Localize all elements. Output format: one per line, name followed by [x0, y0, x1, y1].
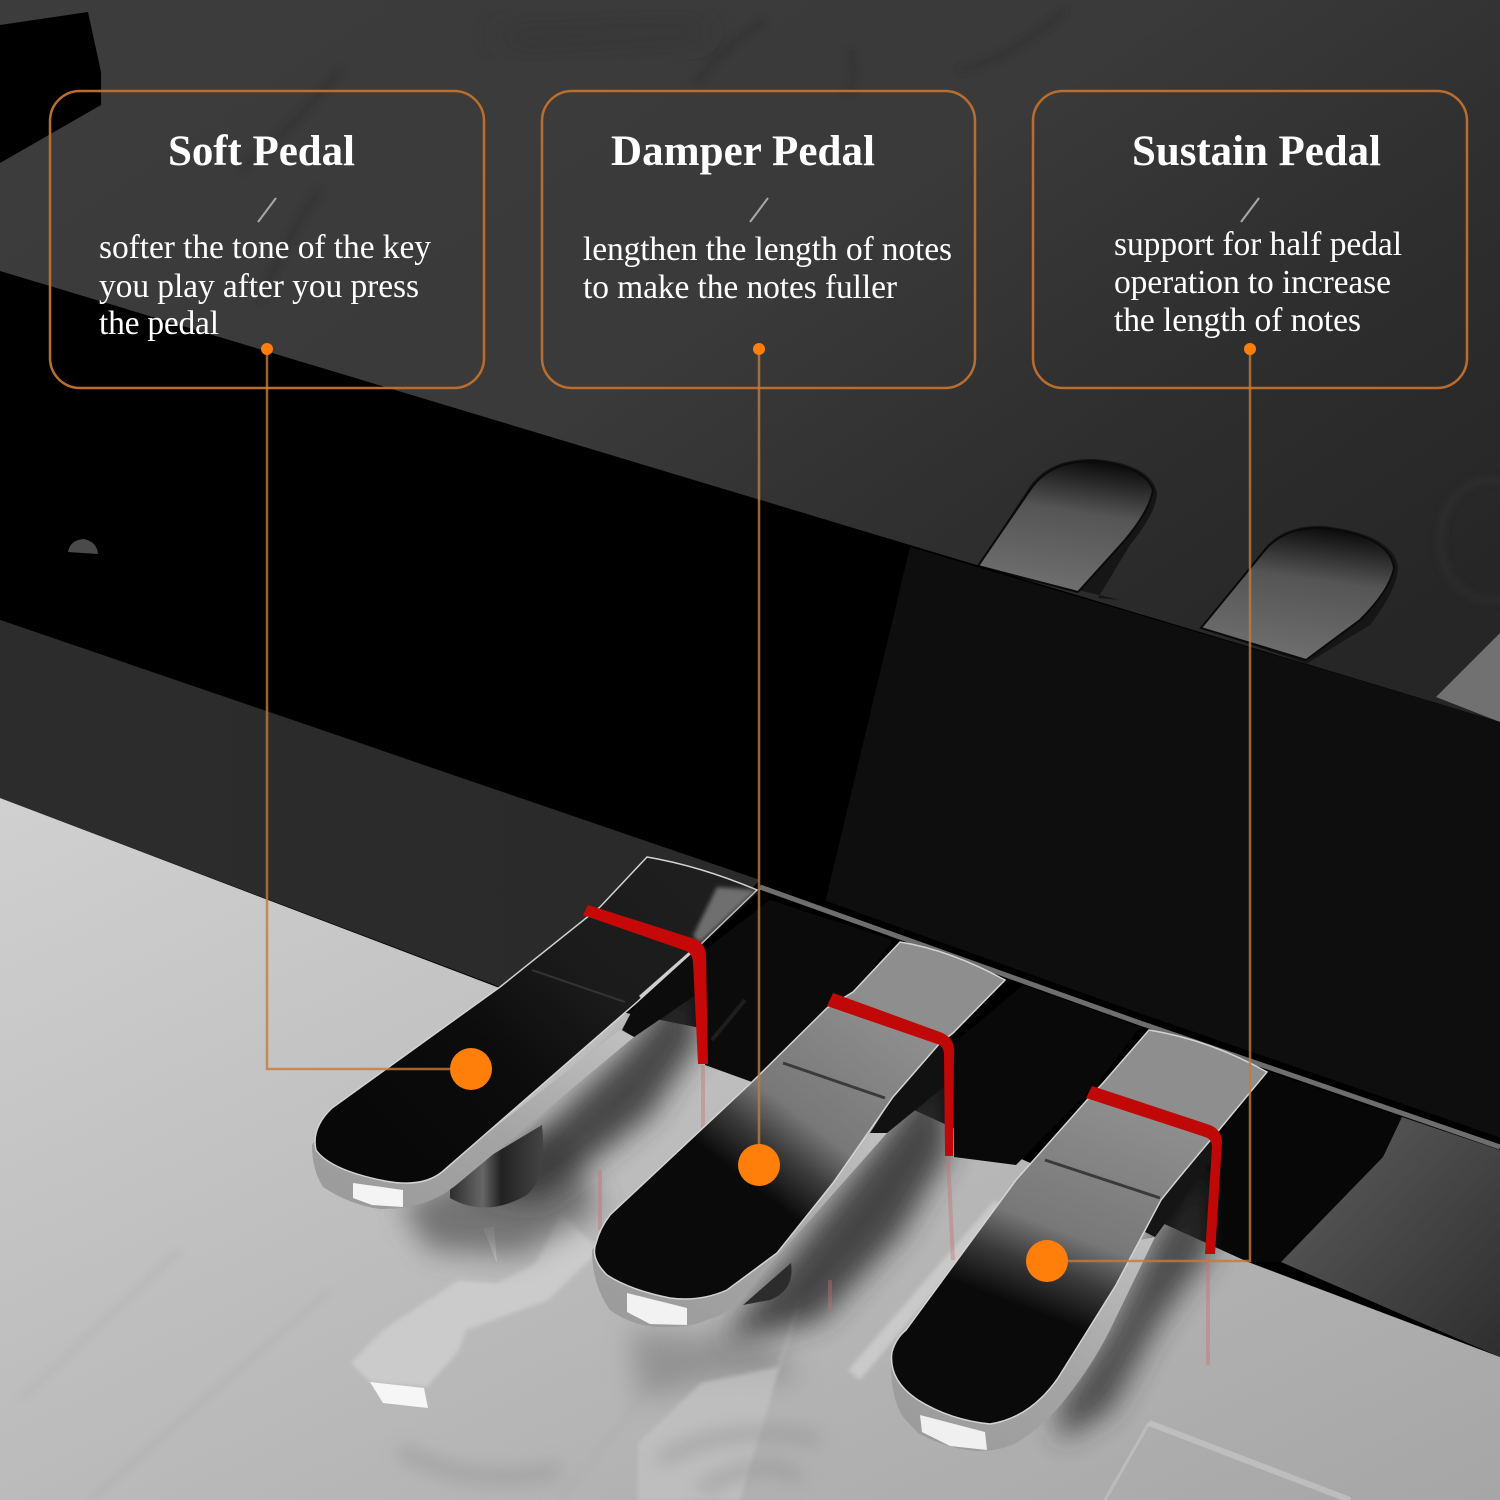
description: sustain pedal: operation to increase: [1114, 264, 1391, 301]
callout panel: sustain pedal: [1033, 91, 1467, 388]
crease: [532, 970, 625, 1002]
connector: sustain pedal: [1026, 343, 1256, 1282]
description: soft pedal: [99, 229, 431, 342]
reflection of soft pedal: [351, 1213, 600, 1387]
chrome rim: [592, 1133, 887, 1327]
side wall: [1145, 1130, 1219, 1237]
second floor reflection: [638, 1300, 800, 1500]
heading: sustain pedal: Sustain Pedal: [1132, 128, 1381, 175]
description: soft pedal: the pedal: [99, 305, 219, 342]
description: soft pedal: softer the tone of the key: [99, 229, 431, 266]
divider slash: [258, 198, 276, 222]
description: sustain pedal: the length of notes: [1114, 302, 1361, 339]
red accent: [583, 905, 708, 1064]
shadows: [400, 1130, 600, 1255]
reflected chrome tip: [370, 1382, 428, 1408]
chrome rim: [312, 1030, 634, 1209]
pedal: sustain: [891, 1030, 1267, 1451]
pedal top surface: [594, 942, 1005, 1299]
pedal: soft: [312, 857, 757, 1209]
heading: damper pedal: Damper Pedal: [611, 128, 875, 175]
description: sustain pedal: support for half pedal: [1114, 226, 1402, 263]
side wall: [622, 945, 703, 1037]
red glow reflections: [600, 1065, 1208, 1365]
piano fascia: black panel: [0, 271, 1500, 1140]
callout panel: soft pedal: [50, 91, 484, 388]
heading: soft pedal: Soft Pedal: [168, 128, 355, 175]
pedal: damper: [592, 942, 1005, 1327]
floor: [0, 798, 1500, 1500]
divider slash: [1241, 198, 1259, 222]
description: soft pedal: you play after you press: [99, 268, 419, 305]
neck edge highlight: [640, 953, 690, 997]
connector: soft pedal: [261, 343, 492, 1090]
description: damper pedal: to make the notes fuller: [583, 269, 897, 306]
divider slash: [750, 198, 768, 222]
red accent: [1086, 1086, 1222, 1254]
stem: [743, 1263, 792, 1305]
lower grey band: reflection on the piano base: [0, 620, 760, 1000]
callout panel: damper pedal: [542, 91, 975, 388]
description: damper pedal: lengthen the length of notes: [583, 231, 952, 268]
description: sustain pedal: [1114, 226, 1402, 339]
rim highlight block: [353, 1183, 403, 1207]
side wall: [870, 1033, 953, 1133]
pedal top surface: [892, 1030, 1267, 1424]
background: marble top surface: [0, 0, 1500, 760]
crease: [783, 1063, 885, 1098]
crease: [1045, 1160, 1160, 1198]
description: damper pedal: [583, 231, 952, 306]
floor reflections and pedal shadows: [351, 960, 1212, 1500]
black blocks between the pedals: [705, 880, 1500, 1357]
chrome rim: [891, 1237, 1155, 1451]
red accent: [827, 993, 954, 1156]
pedal top surface: [315, 857, 757, 1183]
back pedals reflected in the fallboard: [978, 459, 1500, 722]
connector: damper pedal: [738, 343, 780, 1186]
rim highlight block: [627, 1293, 687, 1325]
stem: [450, 1125, 543, 1208]
rim highlight block: [920, 1415, 987, 1450]
